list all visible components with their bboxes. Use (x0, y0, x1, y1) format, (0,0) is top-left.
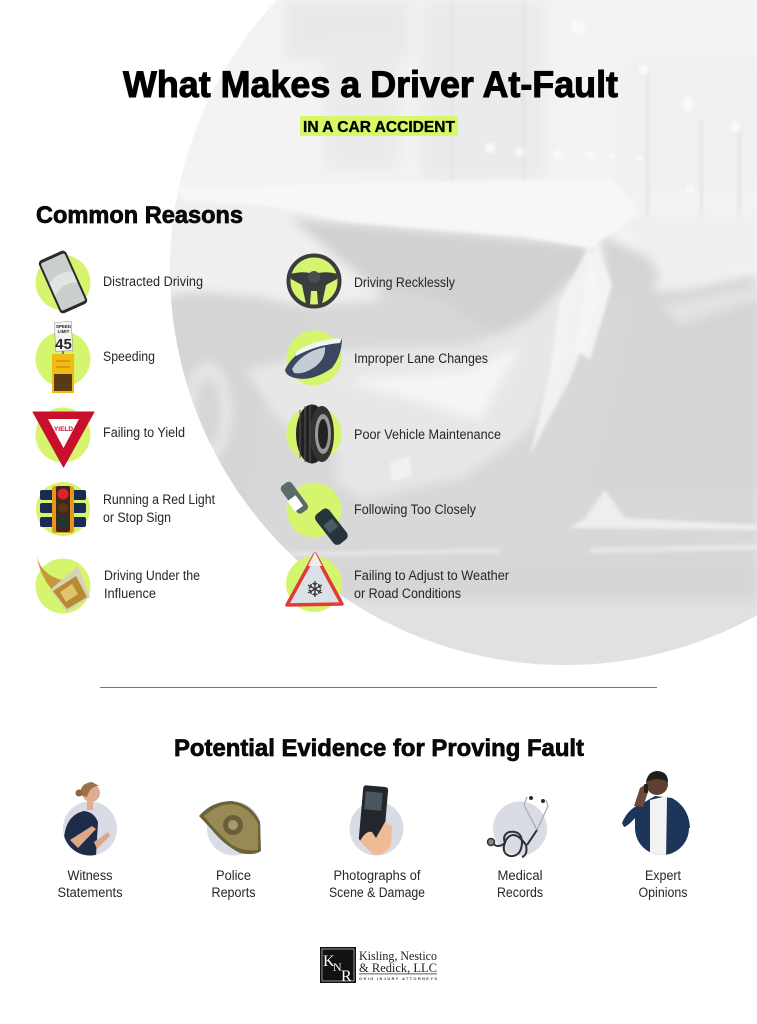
icon: phone in hand (359, 785, 392, 855)
evidence: photographs: Photographs of (334, 868, 421, 883)
icon: traffic light (40, 486, 86, 533)
logo: Kisling, Nestico & Redick, LLC (320, 947, 437, 985)
icon: stethoscope (488, 796, 548, 857)
reason: running a red light: or Stop Sign (103, 510, 171, 525)
reason: failing to yield (33, 408, 185, 467)
reason: driving under the influence: Driving Under the (104, 568, 200, 583)
evidence: witness statements (58, 782, 123, 900)
icon: woman speaking (64, 782, 110, 856)
evidence: photographs (329, 785, 425, 900)
reason: poor vehicle maintenance (286, 404, 501, 464)
icon: speed limit sign: LIMIT (58, 329, 70, 334)
reason: following too closely (279, 480, 476, 547)
heading: common reasons: Common Reasons (36, 202, 243, 229)
evidence: expert opinions (622, 771, 690, 900)
evidence: police reports (199, 801, 261, 900)
icon: two cars (279, 480, 350, 547)
reason: distracted driving: Distracted Driving (103, 274, 203, 289)
logo: Kisling, Nestico & Redick, LLC: OHIO INJURY ATTORNEYS (359, 976, 437, 981)
reason: poor vehicle maintenance: Poor Vehicle Maintenance (354, 427, 501, 442)
evidence: police reports: Police (216, 868, 251, 883)
icon: side mirror (285, 338, 342, 379)
reason: driving under the influence: Influence (104, 586, 156, 601)
evidence: photographs: Scene & Damage (329, 885, 425, 900)
reason: improper lane changes: Improper Lane Changes (354, 351, 488, 366)
evidence: medical records (488, 796, 548, 900)
logo: Kisling, Nestico & Redick, LLC: N (333, 960, 342, 974)
reason: running a red light (36, 482, 215, 536)
car body (160, 195, 757, 675)
icon: yield sign: YIELD (54, 426, 73, 433)
reason: driving under the influence (36, 557, 200, 614)
reason: distracted driving (36, 249, 203, 315)
reason: failing to yield: Failing to Yield (103, 425, 185, 440)
icon: snow warning triangle: ❄ (306, 578, 324, 603)
icon: tire (296, 404, 334, 464)
reason: driving recklessly (287, 254, 455, 308)
icon: steering wheel (288, 256, 340, 306)
evidence: witness statements: Statements (58, 885, 123, 900)
icon: speed limit sign (52, 322, 74, 393)
logo: Kisling, Nestico & Redick, LLC: R (341, 968, 352, 985)
evidence: expert opinions: Expert (645, 868, 681, 883)
reason: failing to adjust to weather: or Road Conditions (354, 586, 461, 601)
icon: smartphone (38, 249, 88, 315)
heading: potential evidence: Potential Evidence for Proving Fault (174, 735, 584, 762)
icon: man on phone (622, 771, 690, 860)
icon: snow warning triangle (287, 552, 342, 605)
title: What Makes a Driver At-Fault (123, 64, 618, 105)
icon: speed limit sign: SPEED (56, 324, 72, 329)
icon: police badge (199, 801, 261, 854)
reason: failing to adjust to weather (286, 552, 509, 612)
reason: running a red light: Running a Red Light (103, 492, 215, 507)
icon: whiskey glass (37, 557, 90, 612)
subtitle highlight: IN A CAR ACCIDENT (303, 119, 455, 136)
evidence: medical records: Records (497, 885, 543, 900)
reason: speeding: Speeding (103, 349, 155, 364)
reason: driving recklessly: Driving Recklessly (354, 275, 455, 290)
logo: Kisling, Nestico & Redick, LLC: & Redick, LLC (359, 961, 437, 975)
evidence: medical records: Medical (498, 868, 542, 883)
hood (291, 216, 756, 556)
background photo: crashed car in circle (160, 0, 757, 675)
evidence: police reports: Reports (212, 885, 256, 900)
logo: Kisling, Nestico & Redick, LLC: Kisling, Nestico (359, 949, 437, 963)
reason: speeding (36, 322, 155, 393)
icon: yield sign (33, 412, 94, 467)
icon: speed limit sign: 45 (55, 336, 72, 353)
evidence: expert opinions: Opinions (638, 885, 688, 900)
evidence: witness statements: Witness (68, 868, 113, 883)
reason: failing to adjust to weather: Failing to Adjust to Weather (354, 568, 509, 583)
logo: Kisling, Nestico & Redick, LLC: K (323, 953, 335, 970)
reason: following too closely: Following Too Closely (354, 502, 476, 517)
reason: improper lane changes (285, 330, 488, 386)
